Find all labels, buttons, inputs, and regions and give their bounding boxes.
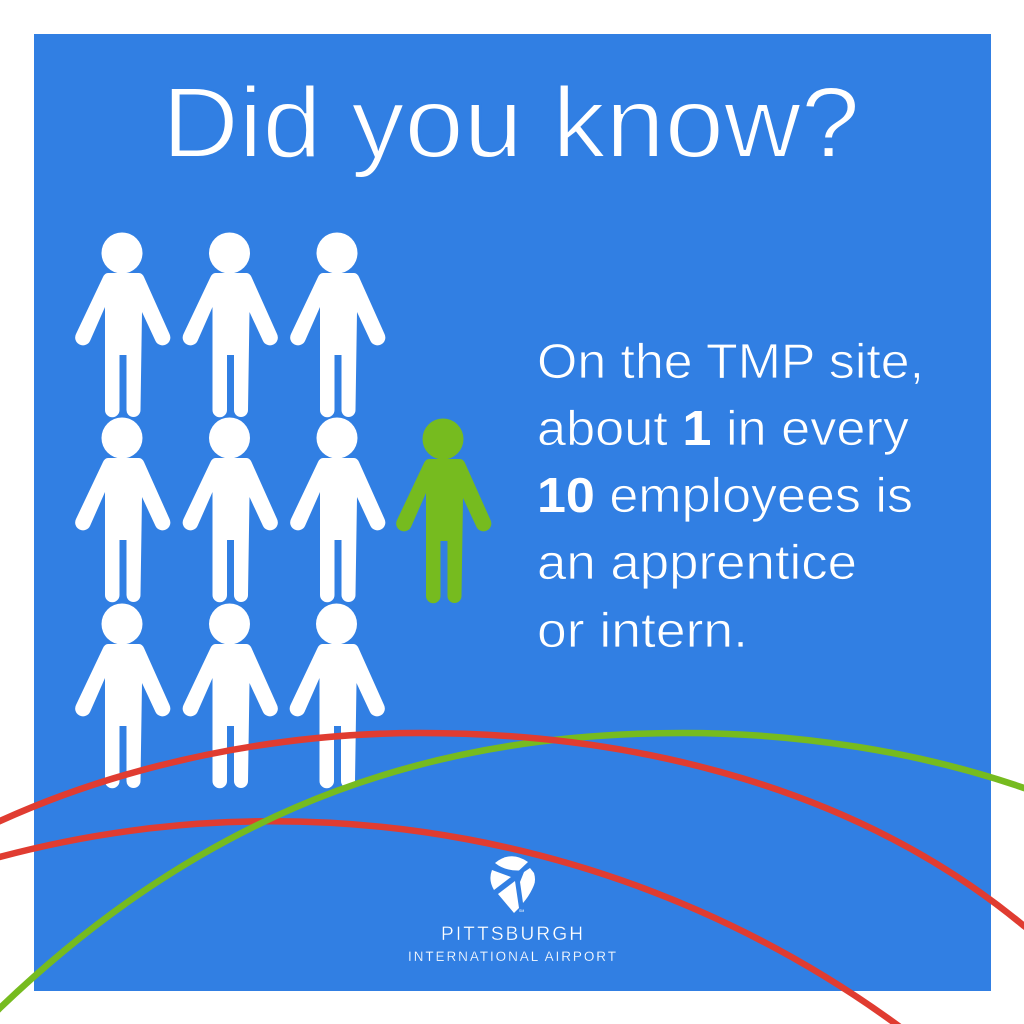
white person row 2 column 3 [290,418,385,602]
white person row 2 column 2 [183,418,278,602]
white person row 3 column 3 [290,604,385,788]
white person row 1 column 3 [290,232,385,417]
statistic text block: an apprentice [537,536,857,590]
decorative arcs: two red, one green [0,733,1024,1024]
logo wordmark line 1: PITTSBURGH [441,924,583,945]
trademark mark: SM [519,909,524,913]
statistic text block: about 1 in every [537,402,910,456]
Pittsburgh International Airport logo [408,856,616,964]
white person row 1 column 2 [183,232,278,417]
white person row 2 column 1 [75,418,170,602]
white person row 1 column 1 [75,232,170,417]
statistic text block: 10 employees is [537,469,913,523]
statistic text block: or intern. [537,604,748,658]
icon: map pin with plane [490,856,535,913]
statistic text block [537,335,924,658]
statistic text block: On the TMP site, [537,335,924,389]
logo wordmark line 2: INTERNATIONAL AIRPORT [408,949,616,964]
pictogram: ten people, one highlighted [75,232,491,788]
white person row 3 column 2 [183,604,278,788]
title: Did you know? [162,67,860,179]
white person row 3 column 1 [75,604,170,788]
green highlighted person [396,418,491,603]
